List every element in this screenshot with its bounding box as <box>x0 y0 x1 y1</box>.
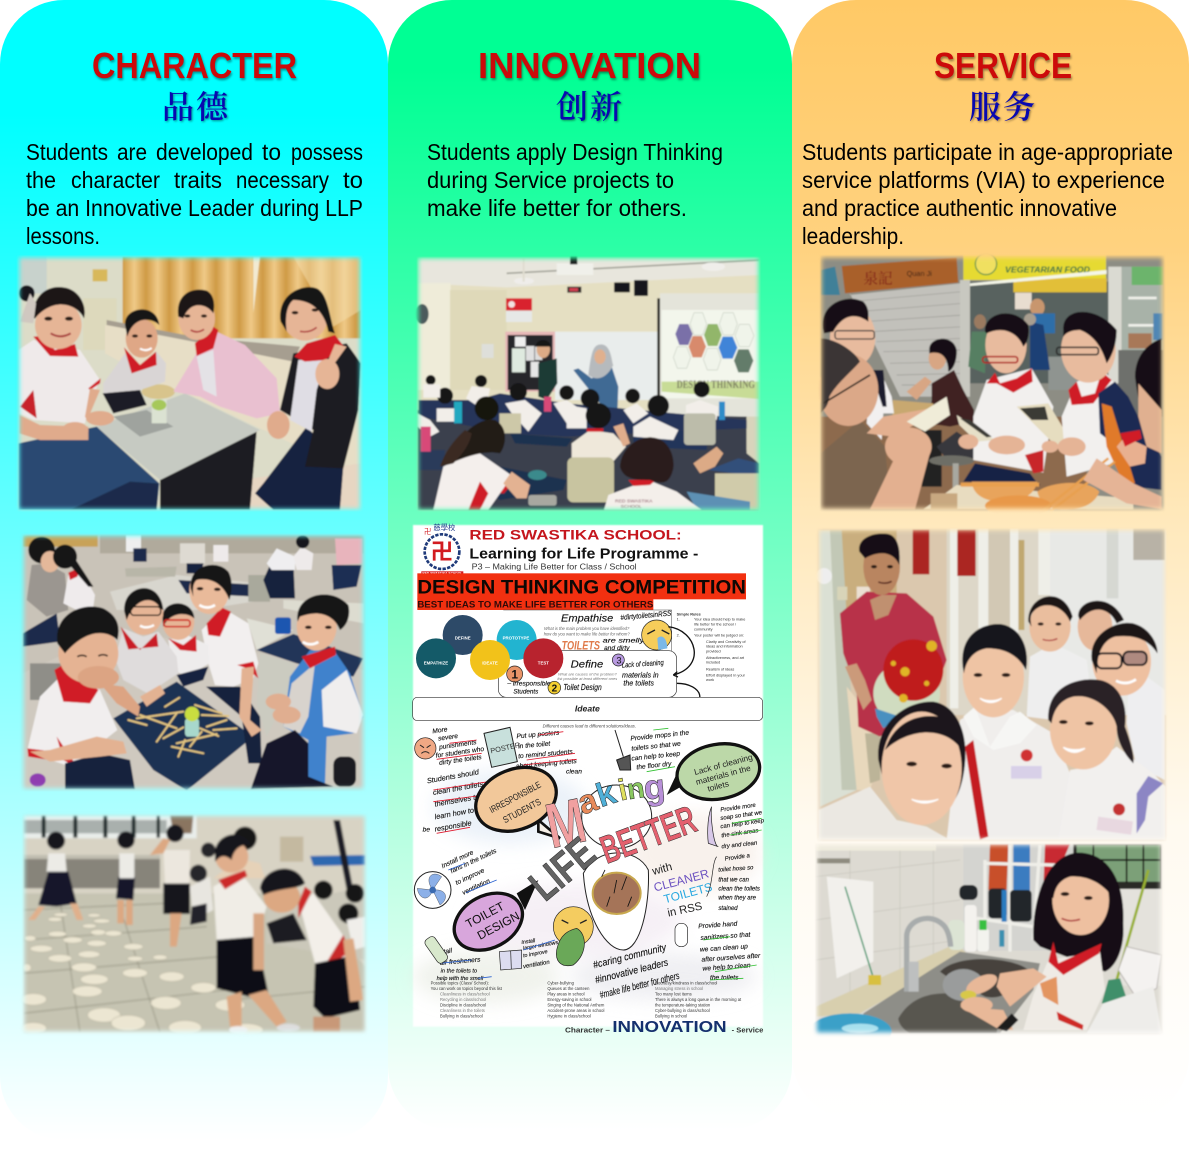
text block: service description: leadership. <box>802 223 904 249</box>
poster simple rules: included <box>706 661 720 665</box>
poster header text: P3 – Making Life Better for Class / School <box>472 561 637 571</box>
poster simple rules: community <box>694 628 713 632</box>
making life better lettering: LIFE <box>521 829 605 910</box>
handwriting: right notes: soap so that we <box>720 810 763 822</box>
topic lists: Possible topics (Class/ School): <box>431 981 489 986</box>
text: with cleaner toilets in RSS: CLEANER <box>652 866 711 895</box>
handwriting: left notes: themselves to <box>434 792 480 809</box>
poster header text: RED SWASTIKA SCHOOL: <box>469 526 682 542</box>
poster header text: Learning for Life Programme - <box>469 546 699 562</box>
handwriting: left notes: in the toilet <box>518 740 552 750</box>
heading: character chinese: 品德 <box>162 82 230 128</box>
hashtags <box>592 942 681 1001</box>
heading: innovation chinese: 创新 <box>556 82 624 128</box>
text block: character description: to <box>343 167 363 193</box>
heading: innovation: INNOVATION <box>478 45 701 86</box>
handwriting: left notes: ventilation <box>461 878 492 897</box>
handwriting: right notes: the toilets <box>710 974 739 981</box>
text block: service description: and practice authentic innovative <box>802 195 1117 221</box>
poster illustration <box>414 726 765 1036</box>
poster footer: INNOVATION <box>612 1019 727 1036</box>
handwriting: left notes: for students who <box>435 746 485 760</box>
topic lists: Too many lost items <box>655 991 692 996</box>
handwriting: left notes: air fresheners <box>440 956 481 967</box>
panel: innovation <box>388 0 792 1130</box>
poster logo: 卍 <box>431 533 453 566</box>
handwriting: left notes: Put up posters <box>516 730 560 740</box>
topic lists: Recycling in class/school <box>440 997 486 1002</box>
topic lists <box>431 981 742 1019</box>
poster define box text: What are causes of the problem? <box>558 671 617 676</box>
speech bubble: irresponsible students: STUDENTS <box>501 797 543 825</box>
panel: service <box>792 0 1189 1120</box>
speech bubble: toilet design <box>444 880 538 962</box>
poster simple rules: Your idea should help to make <box>694 618 745 622</box>
fan icon <box>414 872 451 908</box>
handwriting: right notes: when they are <box>718 895 757 901</box>
poster header text: DESIGN THINKING COMPETITION <box>417 577 746 598</box>
handwriting: left notes: punishments <box>438 739 478 751</box>
speech bubble: toilet design: TOILET <box>463 899 507 931</box>
text block: character description: character <box>71 167 160 193</box>
handwriting: right notes: Provide hand <box>698 921 738 930</box>
handwriting: left notes: help with the smell <box>437 976 484 982</box>
handwriting: left notes: to improve <box>455 867 486 887</box>
handwriting: left notes: clean <box>566 768 582 775</box>
handwriting: left notes: to improve <box>523 949 548 959</box>
poster simple rules: 1. <box>677 618 680 622</box>
poster simple rules: 2. <box>677 633 680 637</box>
panel: character <box>0 0 388 1140</box>
poster background wash <box>413 770 760 1003</box>
topic lists: Play areas in school <box>547 991 585 996</box>
photo: students building with sticks <box>20 533 367 792</box>
handwriting: right notes: Provide a <box>724 853 751 863</box>
poster simple rules: Realism of ideas <box>706 667 734 671</box>
making life better lettering: M <box>540 786 592 862</box>
handwriting: right notes: dry and clean <box>721 841 758 850</box>
poster define box text: the toilets <box>623 678 654 687</box>
handwriting: right notes: the sink areas <box>721 828 759 839</box>
poster simple rules <box>677 612 747 682</box>
handwriting: left notes: be <box>423 827 430 834</box>
text block: service description: Students participate in age-appropriate <box>802 139 1173 165</box>
speech bubble: lack of cleaning materials: Lack of cleaning <box>693 752 754 777</box>
handwriting: left notes: fans in the toilets <box>450 847 498 875</box>
photo: design thinking classroom: SCHOOL <box>621 504 642 510</box>
topic lists: Energy-saving in school <box>547 997 592 1002</box>
handwriting: right notes: toilet hose so <box>718 865 754 874</box>
topic lists: You can work on topics beyond this list <box>431 986 503 991</box>
poster footer: - Service <box>732 1028 763 1035</box>
hashtags: #innovative leaders <box>594 957 669 986</box>
poster define box text: – irresponsible <box>506 681 551 688</box>
poster simple rules: life better for the school / <box>694 623 737 627</box>
photo: design thinking classroom: RED SWASTIKA <box>615 498 653 504</box>
topic lists: Cyber-bullying <box>547 981 575 986</box>
poster define box text: 2 <box>552 684 558 695</box>
handwriting: left notes: in the toilets to <box>441 969 477 975</box>
text block: innovation description: make life better for others. <box>427 195 687 221</box>
poster ideate box: Ideate <box>575 704 600 714</box>
heading: service: SERVICE <box>934 45 1072 86</box>
poster arrows <box>668 627 700 709</box>
handwriting: right notes: Provide mops in the <box>630 730 690 743</box>
text: with cleaner toilets in RSS: TOILETS <box>662 880 714 906</box>
photo: students at hawker centre <box>818 253 1165 517</box>
topic lists: Bullying in class/school <box>440 1014 483 1019</box>
hashtags: #make life better for others <box>599 971 681 1001</box>
poster empathise box: What is the main problem you have identified? <box>544 626 630 631</box>
poster simple rules: Your poster will be judged on: <box>694 633 744 637</box>
poster define box text: list possible at least different ones <box>557 676 617 681</box>
poster define box text: 1 <box>511 668 518 682</box>
topic lists: Cleanliness in class/school <box>440 991 490 996</box>
text: with cleaner toilets in RSS: in RSS <box>666 900 704 920</box>
topic lists: There is always a long queue in the morning at <box>655 997 742 1002</box>
photo: students visiting elderly resident <box>816 528 1167 842</box>
handwriting: left notes: severe <box>438 733 459 743</box>
poster simple rules: provided <box>706 649 721 653</box>
making life better lettering: i <box>615 773 630 808</box>
handwriting: right notes: toilets so that we <box>631 740 681 753</box>
handwriting: left notes <box>423 726 582 982</box>
speech bubble: toilet design: DESIGN <box>475 909 522 943</box>
making life better lettering <box>521 767 702 910</box>
topic lists: Hygiene in class/school <box>547 1014 591 1019</box>
handwriting: left notes: Install <box>521 938 537 946</box>
topic lists: Accident-prone areas in school <box>547 1008 604 1013</box>
handwriting: right notes: sanitizers so that <box>700 931 752 942</box>
speech bubble: irresponsible students: IRRESPONSIBLE <box>488 780 543 815</box>
photo: student washing dishes <box>808 843 1163 1050</box>
poster empathise box <box>503 609 672 652</box>
poster logo: 慈學校 <box>433 522 456 533</box>
poster define box text: 3 <box>616 656 622 666</box>
handwriting: left notes: ventilation <box>523 960 551 970</box>
photo: students at hawker centre: Quan Ji <box>907 269 932 278</box>
handwriting: right notes: stained <box>718 906 738 912</box>
topic lists: Courtesy/kindness in class/school <box>655 981 717 986</box>
making life better lettering: n <box>625 772 647 806</box>
text block: character description <box>26 139 363 249</box>
photo: students at hawker centre: VEGETARIAN FOOD <box>1005 266 1090 275</box>
handwriting: left notes: larger windows <box>523 940 559 952</box>
speech bubble: lack of cleaning materials <box>667 738 764 806</box>
poster define box text: Define <box>571 660 604 671</box>
poster simple rules: ideas and information <box>706 645 743 649</box>
handwriting: left notes: Install more <box>441 849 475 870</box>
poster footer: Character – <box>565 1028 610 1035</box>
poster header text <box>417 526 746 610</box>
handwriting: left notes: dirty the toilets <box>439 754 483 767</box>
poster logo <box>421 522 463 575</box>
poster simple rules: work <box>706 678 714 682</box>
text block: character description: lessons. <box>26 223 100 249</box>
handwriting: right notes: can help to keep <box>720 818 765 830</box>
poster process circles: PROTOTYPE <box>503 635 529 640</box>
hashtags: #caring community <box>592 942 668 971</box>
photo: design thinking classroom: DESIGN THINKING <box>677 379 755 391</box>
making life better lettering: g <box>642 767 667 808</box>
text block: character description: be an Innovative Leader during LLP <box>26 195 363 221</box>
poster header text: BEST IDEAS TO MAKE LIFE BETTER FOR OTHERS <box>417 599 653 609</box>
handwriting: left notes: learn how to <box>434 806 475 821</box>
topic lists: Bullying in school <box>655 1014 687 1019</box>
handwriting: left notes: More <box>432 726 448 735</box>
photo: students at hawker centre: 泉記 <box>863 267 893 288</box>
handwriting: left notes: clean the toilets <box>432 779 484 797</box>
handwriting: right notes: after ourselves after <box>701 953 761 964</box>
poster causes note: Different causes lead to different solutions/ideas. <box>543 723 636 728</box>
making life better lettering: a <box>573 781 603 823</box>
handwriting: right notes <box>630 730 765 981</box>
text block: character description: possess <box>291 139 363 165</box>
text block: service description <box>802 139 1173 249</box>
poster simple rules: Simple Rules <box>677 612 701 616</box>
text block: character description: traits <box>174 167 222 193</box>
handwriting: right notes: clean the toilets <box>718 887 760 893</box>
text block: service description: service platforms (VIA) to experience <box>802 167 1165 193</box>
handwriting: right notes: that we can <box>718 878 750 884</box>
sketch: angry face and poster: POSTER <box>490 740 521 755</box>
text block: innovation description: during Service projects to <box>427 167 674 193</box>
handwriting: left notes: Students should <box>426 767 480 785</box>
photo: design thinking classroom <box>415 256 761 512</box>
handwriting: left notes: responsible <box>434 818 472 834</box>
poster empathise box: TOILETS <box>562 639 600 652</box>
photo: children walking among plates <box>20 813 368 1037</box>
making life better lettering: BETTER <box>595 797 702 872</box>
small sketches <box>423 807 718 970</box>
topic lists: Managing stress in school <box>655 986 703 991</box>
text block: character description: necessary <box>236 167 329 193</box>
text block: character description: are <box>117 139 147 165</box>
sick face <box>553 907 593 966</box>
text block: innovation description <box>427 139 723 221</box>
poster empathise box: and dirty <box>604 645 630 652</box>
poster simple rules: Attractiveness, and art <box>706 656 745 660</box>
text block: character description: to <box>262 139 281 165</box>
text block: character description: developed <box>156 139 253 165</box>
topic lists: the temperature-taking station <box>655 1003 711 1008</box>
text block: character description: Students <box>26 139 108 165</box>
topic lists: Singing of the National Anthem <box>547 1003 605 1008</box>
handwriting: right notes: Provide more <box>720 803 757 814</box>
poster define box text <box>506 654 665 695</box>
poster logo: RED SWASTIKA SCHOOL <box>422 571 462 575</box>
handwriting: right notes: we help to clean <box>702 962 751 973</box>
poster define box text: Students <box>513 688 539 695</box>
poster empathise box: Empathise <box>561 614 614 625</box>
topic lists: Cleanliness in the toilets <box>440 1008 485 1013</box>
topic lists: Queues at the canteen <box>547 986 590 991</box>
poster process circles: IDEATE <box>482 660 498 665</box>
speech bubble: lack of cleaning materials: materials in the <box>695 763 752 787</box>
poster define box outline <box>498 651 677 697</box>
poster simple rules: Clarity and Creativity of <box>706 640 747 644</box>
poster empathise box: #dirtytoiletsinRSS <box>620 609 672 622</box>
handwriting underlines <box>433 728 762 980</box>
handwriting: right notes: can help to keep <box>631 751 681 763</box>
handwriting: right notes: we can clean up <box>700 943 748 954</box>
text: with cleaner toilets in RSS <box>650 861 714 920</box>
photo: students with craft at table <box>17 255 363 512</box>
handwriting: left notes: to remind students <box>518 749 574 760</box>
text block: character description: the <box>26 167 56 193</box>
poster simple rules: Effort displayed in your <box>706 673 746 677</box>
topic lists: Discipline in class/school <box>440 1003 486 1008</box>
toilet drawing <box>582 785 652 950</box>
poster process circles: EMPATHIZE <box>424 660 448 665</box>
handwriting: right notes: the floor dry <box>636 761 672 771</box>
speech bubble: irresponsible students <box>466 756 566 843</box>
poster: design thinking competition <box>413 522 765 1036</box>
poster logo: 卍 <box>424 526 431 537</box>
poster define box text: materials in <box>622 670 659 679</box>
heading: character: CHARACTER <box>92 45 297 86</box>
poster ideate box <box>413 697 763 721</box>
heading: service chinese: 服务 <box>969 82 1037 128</box>
making life better lettering: k <box>592 774 621 815</box>
speech bubble: lack of cleaning materials: toilets <box>706 778 730 794</box>
text: with cleaner toilets in RSS: with <box>650 861 674 878</box>
poster define box text: Toilet Design <box>563 683 602 692</box>
poster process circles <box>416 615 563 680</box>
poster footer <box>565 1019 763 1036</box>
poster empathise box: how do you want to make life better for whom? <box>544 632 630 637</box>
poster process circles: TEST <box>538 660 549 665</box>
topic lists: Cyber-bullying in class/school <box>655 1008 710 1013</box>
poster empathise box: are smelly, <box>603 637 646 644</box>
poster process circles: DEFINE <box>455 636 471 641</box>
handwriting: left notes: Install <box>434 948 453 957</box>
poster define box text: Lack of cleaning <box>622 658 665 670</box>
sketch: angry face and poster <box>415 727 631 770</box>
handwriting: left notes: about keeping toilets <box>516 758 578 770</box>
text block: innovation description: Students apply Design Thinking <box>427 139 723 165</box>
